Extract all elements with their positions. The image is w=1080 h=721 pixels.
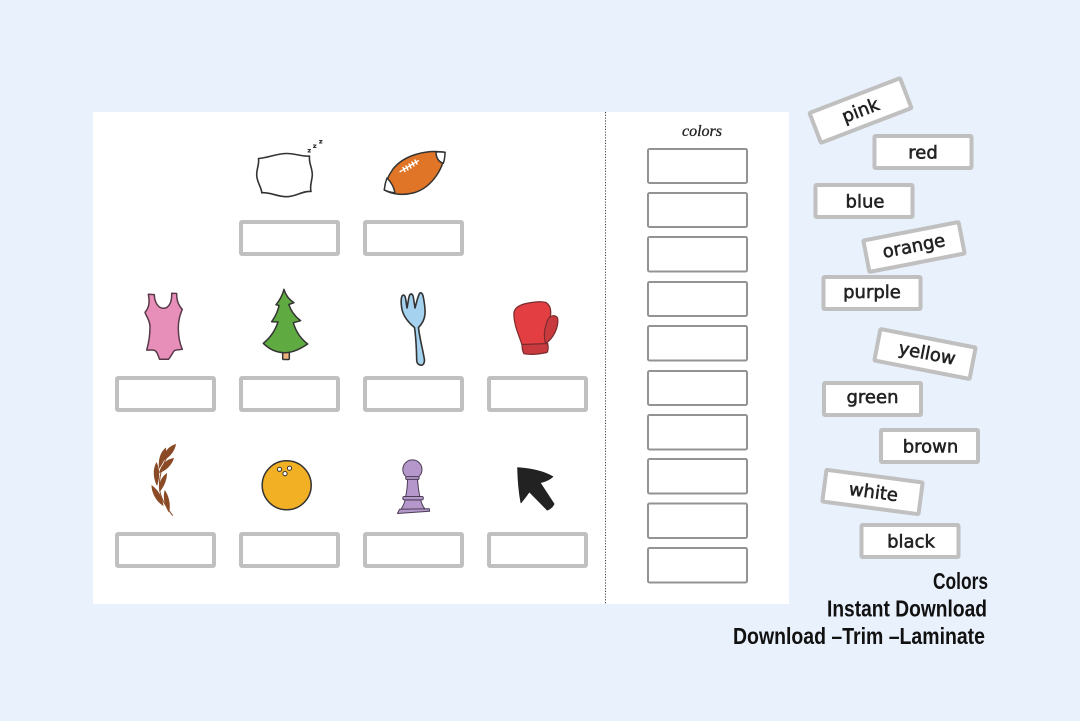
word card: pink: pink: [839, 94, 883, 128]
icon: pine tree: [263, 289, 308, 360]
word card: orange: orange: [881, 230, 947, 263]
word card: red: [874, 136, 972, 168]
footer text: Instant Download: [827, 596, 987, 622]
icon: football: [384, 152, 445, 194]
icon: pillow: [257, 140, 322, 197]
word card: brown: brown: [903, 436, 958, 458]
icon: black arrow cursor: [518, 468, 554, 510]
storage column of empty boxes: [648, 149, 747, 582]
word card: blue: blue: [846, 192, 884, 212]
icon: purple chess pawn: [398, 460, 430, 514]
word card: pink: [809, 78, 912, 143]
icon: fork: [401, 293, 425, 365]
word card: white: [822, 470, 923, 514]
word card: purple: [824, 277, 920, 309]
word card: brown: [881, 430, 978, 462]
word card: black: black: [887, 532, 935, 552]
word card: yellow: [874, 329, 976, 379]
word card: blue: [816, 185, 912, 217]
heading: colors: colors: [682, 123, 722, 140]
word card: purple: purple: [843, 282, 901, 303]
icon: brown branch: [152, 444, 176, 516]
word card: yellow: yellow: [897, 338, 957, 370]
footer text: Download –Trim –Laminate: [733, 623, 985, 649]
answer slots: picture labels: [117, 222, 586, 566]
word card: red: red: [908, 142, 938, 164]
icon: swimsuit: [145, 293, 182, 359]
panel: worksheet: [93, 112, 789, 604]
footer text: [733, 568, 988, 649]
word card: orange: [863, 222, 965, 272]
icon: boxing glove: [514, 302, 558, 354]
icon: orange bowling ball: [262, 461, 311, 510]
word card: black: [862, 525, 958, 557]
footer text: Colors: [933, 568, 988, 594]
word card: white: white: [848, 479, 899, 506]
word card: green: [824, 383, 921, 415]
word card: green: green: [846, 387, 898, 408]
